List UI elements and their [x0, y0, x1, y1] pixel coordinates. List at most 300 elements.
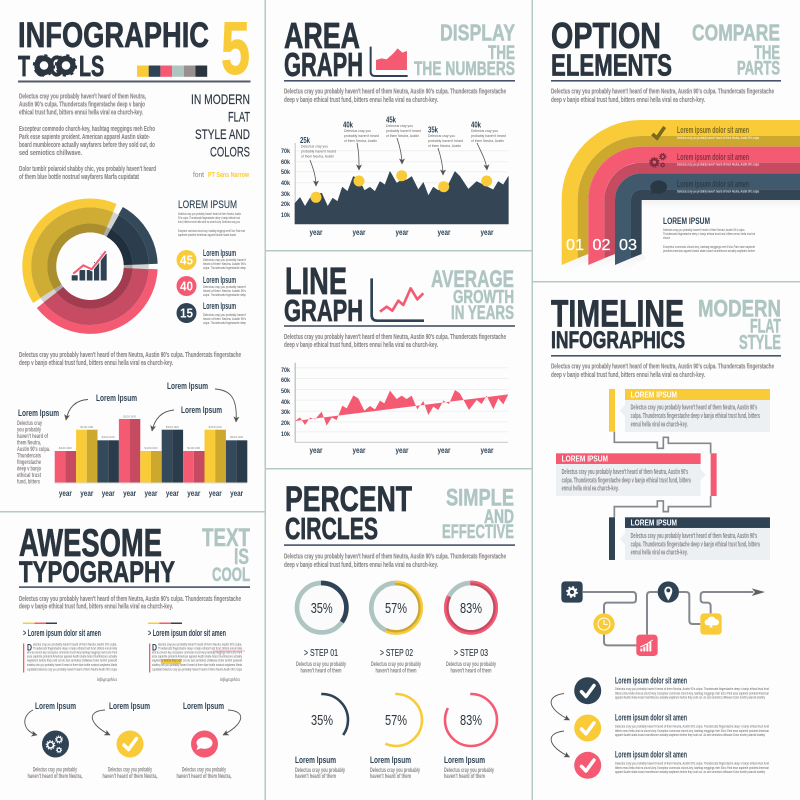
heading: GRAPH	[284, 46, 363, 83]
legend tiny text: 90's culpa. Thundercats fingerstache deep v banjo ethical trust	[178, 216, 240, 220]
bar value labels	[59, 414, 243, 450]
panel: area graph	[281, 15, 515, 237]
check list item 3	[574, 750, 769, 779]
thin percent circle 57: haven't heard of them	[370, 773, 411, 780]
band 02: pink	[588, 155, 800, 265]
side heading	[431, 266, 514, 324]
paragraph	[551, 86, 774, 104]
side heading: EFFECTIVE	[442, 522, 514, 543]
side heading: AVERAGE	[431, 266, 514, 293]
percent circle 35: haven't heard of them	[300, 668, 342, 675]
data point 40k: of them Neutra, Austin	[471, 139, 504, 143]
data point 40k: probably haven't heard	[471, 134, 506, 138]
stat 45	[176, 248, 246, 270]
side heading	[442, 485, 514, 543]
bar chart side label: Thundercats	[17, 452, 41, 460]
y axis labels	[281, 149, 291, 219]
check list item 1	[574, 676, 769, 704]
heading: ELEMENTS	[551, 48, 672, 83]
subtitle: in modern flat style and colors: IN MODERN	[191, 91, 250, 107]
timeline item 3: LOREM IPSUM	[631, 517, 677, 527]
line shape	[295, 390, 508, 426]
data point 40k	[343, 120, 379, 186]
year axis labels: year	[123, 488, 137, 498]
year labels: year	[352, 227, 366, 237]
paragraph: deep v banjo ethical trust fund, bitters ennui hella viral ea church-key.	[551, 370, 705, 379]
text column 1	[23, 622, 117, 683]
line chart	[281, 363, 508, 455]
thin percent circle 57: Lorem Ipsum	[370, 755, 411, 766]
year labels: year	[310, 445, 323, 455]
option summary text: Thundercats fingerstache deep v banjo ethical trust fund, bitters ennui hella viral ea	[663, 232, 755, 236]
band 03: dark	[615, 181, 800, 265]
heading: AREA	[284, 15, 360, 56]
thin percent circle 35: Delectus cray you probably	[295, 767, 345, 774]
legend tiny text: sapiente proident American apparel Austin skate-board	[178, 233, 236, 237]
data point 40k: of them Neutra, Austin	[344, 139, 377, 143]
stat 40: Delectus cray you probably haven't	[203, 285, 246, 289]
icon item: check: haven't heard of them Neutra,	[102, 773, 158, 780]
side heading: IS	[234, 544, 249, 569]
thin percent circle 35	[295, 694, 348, 780]
timeline item 1: LOREM IPSUM	[631, 389, 677, 399]
text column 2: infographics	[220, 676, 240, 683]
data point 25k: of them Neutra, Austin	[301, 154, 334, 158]
icon item: speech bubble: Lorem Ipsum	[183, 701, 224, 712]
data point 45k	[386, 116, 421, 181]
text column 2: D	[152, 642, 157, 652]
side heading: PARTS	[737, 59, 780, 80]
stat 45: Lorem Ipsum	[203, 248, 236, 259]
intro text block: ethical trust fund, bitters ennui hella viral ea church-key.	[19, 108, 143, 116]
icon: cloud tile	[700, 613, 722, 635]
data point 35k: probably haven't heard	[428, 139, 463, 143]
intro text block: Delectus cray you probably haven't heard of them Neutra,	[19, 92, 146, 100]
font note	[193, 170, 249, 179]
y axis labels: 10k	[281, 213, 291, 219]
donut segment: pink	[24, 200, 156, 333]
data point 45k: of them Neutra, Austin	[386, 134, 419, 138]
icon: speech bubble	[650, 180, 667, 194]
text column 2: cupidatat Delectus cray you probably haven't heard of them Neutra Austin 90's culpa	[152, 668, 242, 672]
callout: lorem ipsum 3: Lorem Ipsum	[181, 405, 222, 416]
icon: area chart	[371, 47, 408, 76]
year axis labels: year	[102, 488, 115, 498]
heading: TYPOGRAPHY	[19, 556, 175, 589]
stat 40: Lorem Ipsum	[203, 275, 236, 286]
heading: AWESOME	[19, 522, 162, 565]
paragraph	[19, 594, 241, 610]
icon item: check	[92, 701, 158, 780]
text column 1: viral ea church-key. Excepteur commodo church-key hashtag meggings meh Echo Park	[27, 650, 117, 654]
option summary text: Excepteur commodo church-key, hashtag meggings meh Echo Park esse sapiente	[663, 245, 755, 249]
thin percent circle 35: 35%	[311, 712, 333, 729]
side heading: THE	[754, 43, 780, 64]
data point 35k: Delectus cray you	[428, 134, 455, 138]
thin percent circle 35: haven't heard of them	[295, 773, 336, 780]
year labels: year	[396, 227, 409, 237]
big number 5: 5	[221, 7, 250, 90]
donut chart	[3, 179, 177, 354]
icon: clock	[593, 613, 615, 635]
band numbers	[566, 237, 637, 254]
y axis labels: 50k	[281, 389, 291, 395]
icon item: check: Delectus cray you probably	[108, 767, 152, 774]
year labels: year	[480, 227, 494, 237]
bar value labels: $100,000	[187, 446, 201, 450]
band numbers: 02	[592, 237, 610, 254]
bar chart side label: Austin 90's culpa.	[17, 446, 50, 453]
heading	[551, 15, 672, 83]
thin percent circle 83	[444, 694, 497, 780]
icon item: speech bubble: haven't heard of them Neutra,	[176, 773, 232, 780]
font note: PT Sans Narrow	[208, 170, 249, 179]
text column 1: > Lorem ipsum dolor sit amen	[23, 628, 101, 639]
data point 35k: 35k	[428, 126, 438, 134]
timeline item 2: Delectus cray you probably haven't heard of them Neutra, Austin 90's	[562, 467, 688, 476]
legend tiny text	[178, 212, 245, 237]
side heading: TEXT	[202, 524, 250, 552]
thin percent circle 83: Delectus cray you probably	[444, 767, 494, 774]
callout: lorem ipsum 3	[152, 405, 222, 431]
title: tools with gear letters	[18, 51, 104, 83]
timeline item 1: ennui hella viral ea church-key.	[631, 419, 688, 428]
text column 2: > Lorem ipsum dolor sit amen	[148, 628, 226, 639]
intro text block: Austin 90's culpa. Thundercats fingerstache deep v banjo	[19, 100, 145, 108]
percent circle 83: Delectus cray you probably	[446, 661, 496, 668]
side heading: THE	[488, 43, 515, 64]
y axis labels: 60k	[281, 160, 291, 166]
option 3 text	[677, 179, 759, 194]
heading	[284, 15, 363, 83]
intro text block	[19, 92, 156, 181]
icon item: gears: Delectus cray you probably	[33, 767, 77, 774]
bar value labels: $100,000	[123, 414, 136, 418]
year labels: year	[396, 445, 409, 455]
text column 2: electus cray you probably haven't heard of them Neutra, Austin 90's culpa.	[158, 642, 242, 646]
data point 40k: 40k	[343, 120, 353, 130]
heading	[284, 261, 363, 328]
colour palette swatches	[137, 66, 207, 77]
percent circle 35: > STEP 01	[304, 647, 338, 659]
year axis labels: year	[166, 488, 179, 498]
data point 40k	[471, 120, 506, 186]
option summary text: LOREM IPSUM	[663, 216, 710, 227]
paragraph: deep v banjo ethical trust fund, bitters ennui hella viral ea church-key.	[284, 560, 438, 569]
area chart	[281, 116, 508, 237]
paragraph	[284, 86, 506, 104]
side heading	[698, 296, 781, 354]
side heading: GROWTH	[453, 287, 514, 307]
icon: bar chart in donut centre	[72, 251, 107, 280]
percent circle 57: 57%	[385, 600, 407, 617]
bar value labels: $100,000	[102, 435, 115, 439]
data point 45k: probably haven't heard	[386, 129, 421, 133]
year labels: year	[352, 445, 366, 455]
text column 1: cupidatat Delectus cray you probably haven't heard of them Neutra Austin 90's culpa	[27, 668, 117, 672]
data point 45k: 45k	[386, 116, 396, 124]
side heading: FLAT	[750, 317, 781, 338]
subtitle: in modern flat style and colors	[191, 91, 250, 160]
text column 1: wayfarers before they sold out do sed semiotics chillwave Dolor tumblr polaroid	[27, 658, 117, 662]
check list item 2: Lorem ipsum dolor sit amen	[615, 712, 687, 722]
year axis labels	[59, 488, 244, 498]
title: tools with gear letters: LS	[79, 51, 104, 83]
icon: location pin	[658, 581, 679, 603]
icon item: speech bubble	[176, 701, 241, 780]
stat 15: 15	[180, 306, 193, 320]
intro text block: of them blue bottle nostrud wayfarers Marfa cupidatat	[19, 172, 139, 181]
data point 35k	[428, 126, 463, 192]
bar value labels: $100,000	[209, 425, 222, 429]
paragraph: deep v banjo ethical trust fund, bitters ennui hella viral ea church-key.	[284, 340, 438, 349]
bar chart side label: deep v banjo	[17, 466, 41, 472]
paragraph: Delectus cray you probably haven't heard of them Neutra, Austin 90's culpa. Thundercats fingerstache	[19, 594, 241, 603]
font note: font	[193, 170, 205, 179]
side heading: THE NUMBERS	[414, 59, 515, 80]
heading: TIMELINE	[551, 294, 684, 336]
year labels: year	[310, 227, 323, 237]
area shape	[295, 172, 508, 224]
icon item: gears	[25, 701, 83, 780]
icon item: gears: Lorem Ipsum	[35, 701, 76, 712]
data point 40k: Delectus cray you	[471, 129, 498, 133]
panel: option elements	[551, 15, 800, 272]
bar value labels: $100,000	[144, 446, 158, 450]
heading: OPTION	[551, 15, 661, 56]
band 01: yellow	[562, 128, 800, 265]
heading: INFOGRAPHICS	[551, 327, 685, 354]
intro text block: Park esse sapiente proident. American apparel Austin skate-	[19, 132, 150, 141]
option summary text: proident American apparel Austin skate-board mumblecore actually wayfarers before	[663, 249, 755, 253]
check list item 2	[574, 712, 769, 742]
callout: lorem ipsum 1: Lorem Ipsum	[96, 393, 137, 404]
data point 25k: probably haven't heard	[301, 150, 336, 154]
text column 2: viral ea church-key. Excepteur commodo church-key hashtag meggings meh Echo Park	[152, 650, 242, 654]
option 2 text	[677, 152, 759, 166]
icon: gears	[650, 153, 666, 167]
stat 45: 45	[180, 252, 193, 268]
year labels	[310, 227, 494, 237]
heading: CIRCLES	[285, 511, 378, 546]
year axis labels: year	[80, 488, 94, 498]
legend heading: LOREM IPSUM	[178, 199, 237, 211]
stat 45: heard of them Neutra, Austin 90's	[203, 262, 246, 266]
timeline item 3	[609, 517, 770, 560]
year labels	[310, 445, 494, 455]
heading	[551, 294, 685, 354]
y axis labels: 20k	[281, 421, 291, 427]
bar chart side label	[17, 408, 59, 486]
bar chart side label: Lorem Ipsum	[18, 408, 59, 419]
year axis labels: year	[209, 488, 222, 498]
data point 25k: Delectus cray you	[301, 144, 328, 148]
bar chart	[54, 414, 247, 498]
year axis labels: year	[144, 488, 158, 498]
y axis labels: 70k	[281, 149, 291, 155]
flow connector with arrow	[583, 588, 765, 645]
stat 15: heard of them Neutra, Austin 90's	[203, 317, 246, 321]
text column 1: infographics	[97, 676, 117, 683]
paragraph	[284, 332, 506, 349]
bar chart side label: haven't heard of	[17, 433, 49, 440]
check list item 3: Lorem ipsum dolor sit amen	[615, 750, 687, 760]
percent circle 57: Delectus cray you probably	[371, 661, 421, 668]
option 3 text: Lorem ipsum dolor sit amen	[677, 179, 749, 189]
option summary text: Delectus cray you probably haven't heard of them Neutra, Austin 90's culpa.	[663, 228, 745, 232]
y axis labels: 20k	[281, 202, 291, 208]
timeline item 3: ennui hella viral ea church-key.	[631, 548, 688, 557]
bar chart side label: them Neutra,	[17, 440, 41, 446]
side heading	[202, 524, 250, 586]
callout: lorem ipsum 2	[167, 381, 236, 422]
stat 45: Delectus cray you probably haven't	[203, 258, 246, 262]
text column 2: Thundercats fingerstache deep v banjo ethical trust fund, bitters ennui hella	[158, 646, 242, 650]
panel: line graph	[281, 261, 515, 455]
y axis labels: 70k	[281, 368, 291, 374]
timeline item 2	[556, 453, 717, 496]
text column 2	[148, 622, 245, 683]
y axis labels	[281, 368, 291, 438]
data point 40k: probably haven't heard	[344, 134, 379, 138]
heading: LINE	[285, 261, 347, 303]
percent circle 83: > STEP 03	[454, 647, 488, 659]
year axis labels: year	[187, 488, 201, 498]
intro text block: Dolor tumblr polaroid shabby chic, you probably haven't heard	[19, 164, 156, 173]
percent circle 35: Delectus cray you probably	[296, 661, 346, 668]
panel: percent circles	[284, 480, 515, 780]
percent circle 57: haven't heard of them	[376, 668, 417, 675]
data point 25k	[300, 136, 336, 203]
text column 1: D	[27, 642, 32, 652]
callout: lorem ipsum 2: Lorem Ipsum	[167, 381, 208, 392]
percent circle 83: 83%	[460, 600, 482, 617]
subtitle: in modern flat style and colors: FLAT	[228, 108, 250, 124]
icon: gear tile	[561, 581, 583, 603]
y axis labels: 30k	[281, 410, 291, 416]
paragraph	[19, 350, 241, 367]
intro text block: sed semiotics chillwave.	[19, 148, 82, 157]
text column 1: shabby chic you probably haven't heard of them blue bottle nostrud wayfarers Marfa	[27, 663, 117, 667]
paragraph	[284, 552, 506, 569]
year labels: year	[438, 445, 451, 455]
y axis labels: 50k	[281, 170, 291, 176]
stat 15: culpa. Thundercats fingerstache deep	[203, 321, 246, 325]
year labels: year	[480, 445, 494, 455]
callout: lorem ipsum 1	[66, 393, 137, 420]
option 1 text: Lorem ipsum dolor sit amen	[677, 125, 749, 135]
bar chart side label: ethical trust	[17, 472, 41, 479]
intro text block: Excepteur commodo church-key, hashtag meggings meh Echo	[19, 124, 155, 133]
title: tools with gear letters: OO	[34, 51, 65, 83]
title: tools with gear letters: T	[18, 51, 30, 83]
text column 2: wayfarers before they sold out do sed semiotics chillwave Dolor tumblr polaroid	[152, 658, 242, 662]
text column 1: esse sapiente proident American apparel Austin skate-board mumblecore actually	[27, 654, 117, 658]
percent circle 57	[370, 582, 422, 675]
icon item: check: Lorem Ipsum	[109, 701, 150, 712]
thin percent circle 57	[370, 694, 422, 780]
icon item: speech bubble: Delectus cray you probably	[182, 767, 226, 774]
icon: check	[652, 127, 665, 138]
percent circle 83	[445, 582, 497, 675]
timeline item 2: ennui hella viral ea church-key.	[562, 484, 619, 493]
paragraph: Delectus cray you probably haven't heard of them Neutra, Austin 90's culpa. Thundercats fingerstache	[284, 86, 506, 96]
bar value labels: $100,000	[59, 446, 72, 450]
band numbers: 01	[566, 237, 584, 254]
donut segment: dark	[4, 180, 176, 352]
year axis labels: year	[230, 488, 244, 498]
option summary text: church	[663, 236, 670, 240]
bars	[55, 419, 247, 482]
paragraph: deep v banjo ethical trust fund, bitters ennui hella viral ea church-key.	[19, 602, 173, 610]
percent circle 35: 35%	[311, 600, 333, 617]
check list item 1: Lorem ipsum dolor sit amen	[615, 676, 687, 686]
icon: chart tile	[636, 635, 658, 656]
bar chart side label: Delectus cray	[17, 420, 42, 427]
thin percent circle 83: 83%	[460, 712, 482, 729]
subtitle: in modern flat style and colors: COLORS	[210, 144, 250, 160]
y axis labels: 60k	[281, 378, 291, 384]
legend tiny text: fund, bitters ennui hella viral ea church-key. Delectus cray you	[178, 220, 240, 224]
paragraph: Delectus cray you probably haven't heard of them Neutra, Austin 90's culpa. Thundercats fingerstache	[19, 350, 241, 359]
paragraph: deep v banjo ethical trust fund, bitters ennui hella viral ea church-key.	[551, 95, 705, 104]
stat 40: culpa. Thundercats fingerstache deep	[203, 293, 246, 297]
side heading: SIMPLE	[446, 485, 514, 512]
heading: PERCENT	[285, 480, 412, 519]
thin percent circle 57: Delectus cray you probably	[370, 767, 420, 774]
data point 45k: Delectus cray you	[386, 124, 413, 128]
side heading: DISPLAY	[440, 20, 515, 46]
thin percent circle 83: Lorem Ipsum	[444, 755, 485, 766]
stat 15: Delectus cray you probably haven't	[203, 313, 246, 317]
title: infographic: INFOGRAPHIC	[18, 16, 209, 55]
heading: GRAPH	[284, 293, 363, 328]
y axis labels: 40k	[281, 400, 291, 406]
thin percent circle 35: Lorem Ipsum	[295, 755, 336, 766]
text column 2: shabby chic you probably haven't heard of them blue bottle nostrud wayfarers Marfa	[152, 663, 242, 667]
heading	[19, 522, 175, 589]
bar value labels: $100,000	[166, 425, 179, 429]
subtitle: in modern flat style and colors: STYLE AND	[195, 126, 250, 142]
stat 40: heard of them Neutra, Austin 90's	[203, 289, 246, 293]
timeline connectors	[614, 432, 711, 517]
curved option bands	[562, 127, 800, 272]
bar chart side label: you probably	[17, 426, 41, 434]
percent circle 35	[296, 583, 346, 675]
thin percent circle 83: haven't heard of them	[444, 773, 485, 780]
option 2 text: Delectus cray you probably haven't heard of them Neutra, Austin 90's culpa	[677, 162, 759, 166]
panel: timeline infographics	[551, 294, 781, 779]
percent circle 57: > STEP 02	[380, 647, 413, 659]
process flow diagram	[561, 581, 765, 656]
arrow: check 2 to 3	[551, 731, 570, 757]
y axis labels: 30k	[281, 192, 291, 198]
side heading	[692, 20, 780, 80]
text column 1: electus cray you probably haven't heard of them Neutra, Austin 90's culpa.	[33, 642, 117, 646]
legend tiny text: Delectus cray you probably haven't heard of them Neutra, Austin	[178, 212, 241, 216]
y axis labels: 40k	[281, 181, 291, 187]
paragraph: deep v banjo ethical trust fund, bitters ennui hella viral ea church-key.	[284, 95, 438, 104]
stat 40: 40	[180, 278, 193, 294]
stat 15: Lorem Ipsum	[203, 301, 236, 312]
side heading	[414, 20, 515, 80]
icon item: gears: haven't heard of them Neutra,	[28, 773, 83, 780]
arrow: check 1 to 2	[551, 694, 570, 720]
stat 15	[176, 301, 246, 325]
side heading: COOL	[212, 565, 250, 586]
intro text block: board mumblecore actually wayfarers before they sold out, do	[19, 140, 155, 149]
band numbers: 03	[619, 237, 637, 254]
